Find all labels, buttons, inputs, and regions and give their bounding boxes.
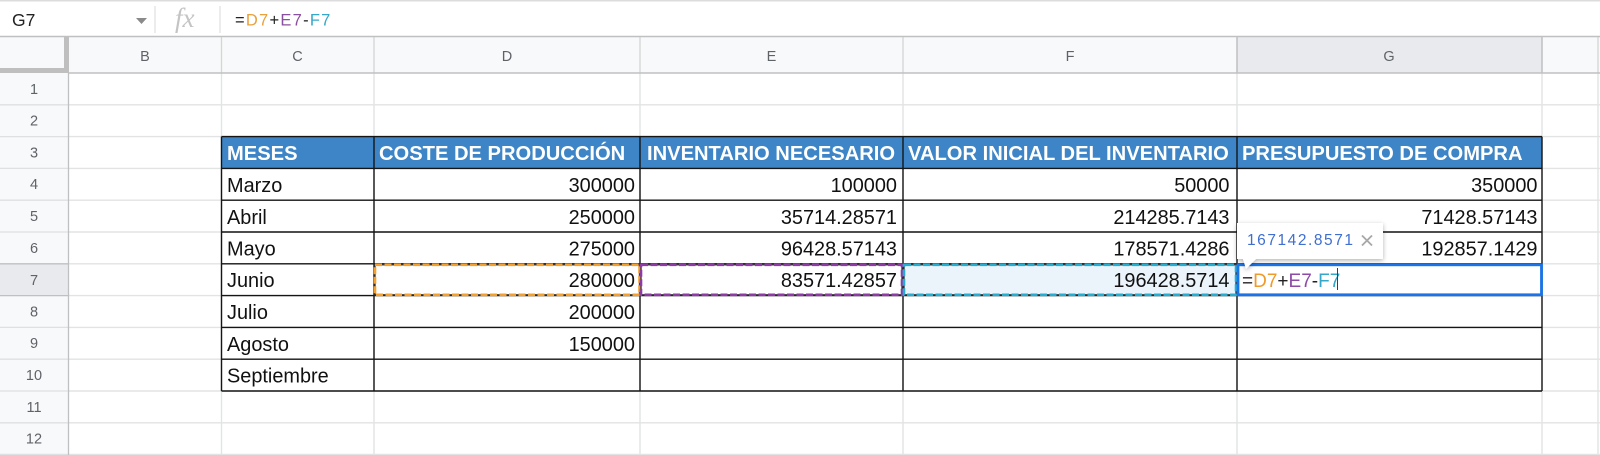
column: inventario necesario: 100000 bbox=[831, 175, 897, 197]
tooltip: formula result preview: 167142.8571 bbox=[1247, 232, 1355, 249]
column headers: G bbox=[1383, 49, 1395, 65]
row headers: 4 bbox=[30, 177, 38, 193]
icon: dropdown arrow bbox=[136, 18, 147, 24]
icon: close bbox=[1362, 236, 1372, 246]
row headers: 2 bbox=[30, 114, 38, 130]
table header row: INVENTARIO NECESARIO bbox=[647, 143, 895, 165]
column: coste de producción: 275000 bbox=[569, 238, 635, 260]
icon: fx: fx bbox=[175, 3, 195, 33]
column headers bbox=[0, 36, 1600, 73]
column headers: C bbox=[292, 49, 303, 65]
column: meses: Abril bbox=[227, 207, 267, 229]
column: coste de producción: 300000 bbox=[569, 175, 635, 197]
table header row: COSTE DE PRODUCCIÓN bbox=[379, 141, 625, 165]
row headers: 5 bbox=[30, 209, 38, 225]
highlighted cell F7 fill bbox=[903, 264, 1237, 296]
column: coste de producción: 200000 bbox=[569, 302, 635, 324]
table header row: VALOR INICIAL DEL INVENTARIO bbox=[908, 143, 1229, 165]
column headers: B bbox=[140, 49, 150, 65]
column: presupuesto de compra bbox=[1421, 175, 1538, 260]
table header row: PRESUPUESTO DE COMPRA bbox=[1242, 143, 1523, 165]
row headers: 11 bbox=[26, 400, 42, 416]
column headers: F bbox=[1066, 49, 1075, 65]
column: inventario necesario: 83571.42857 bbox=[781, 270, 897, 292]
row headers: 10 bbox=[26, 368, 42, 384]
column: valor inicial del inventario: 196428.5714 bbox=[1113, 270, 1230, 292]
formula bar bbox=[0, 0, 1600, 37]
dashed range D7 bbox=[375, 265, 640, 295]
cell reference: G7 bbox=[12, 10, 35, 30]
column: inventario necesario: 35714.28571 bbox=[781, 207, 897, 229]
row headers: 12 bbox=[26, 432, 42, 448]
table header row: MESES bbox=[227, 143, 298, 165]
formula in cell: =D7+E7-F7 bbox=[1242, 271, 1340, 292]
column: meses: Mayo bbox=[227, 238, 276, 260]
table borders bbox=[222, 137, 1542, 391]
column: presupuesto de compra: 192857.1429 bbox=[1421, 238, 1538, 260]
column: meses: Marzo bbox=[227, 175, 282, 197]
tooltip: formula result preview bbox=[1237, 223, 1383, 269]
column: coste de producción bbox=[569, 175, 635, 356]
column: presupuesto de compra: 350000 bbox=[1471, 175, 1538, 197]
formula text: =D7+E7-F7 bbox=[235, 12, 332, 30]
column: coste de producción: 280000 bbox=[569, 270, 635, 292]
column: coste de producción: 150000 bbox=[569, 334, 635, 356]
column headers: D bbox=[502, 49, 512, 65]
column: valor inicial del inventario: 50000 bbox=[1174, 175, 1230, 197]
column: meses bbox=[227, 175, 329, 388]
row headers: 6 bbox=[30, 241, 38, 257]
column headers: E bbox=[767, 49, 777, 65]
dashed range E7 bbox=[641, 265, 902, 295]
row headers: 9 bbox=[30, 336, 38, 352]
column: inventario necesario: 96428.57143 bbox=[781, 238, 897, 260]
row headers: 1 bbox=[30, 82, 38, 98]
column: meses: Julio bbox=[227, 302, 268, 324]
column: valor inicial del inventario bbox=[1113, 175, 1230, 292]
active cell G7 bbox=[1238, 265, 1542, 295]
column: inventario necesario bbox=[781, 175, 897, 292]
column: presupuesto de compra: 71428.57143 bbox=[1421, 207, 1538, 229]
column: coste de producción: 250000 bbox=[569, 207, 635, 229]
column: valor inicial del inventario: 214285.7143 bbox=[1113, 207, 1230, 229]
row headers: 8 bbox=[30, 304, 38, 320]
corner freeze handle bbox=[0, 37, 66, 70]
row headers: 3 bbox=[30, 146, 38, 162]
row headers: 7 bbox=[30, 273, 38, 289]
column: meses: Agosto bbox=[227, 334, 289, 356]
column: meses: Septiembre bbox=[227, 366, 329, 388]
row headers bbox=[0, 73, 68, 455]
column: valor inicial del inventario: 178571.4286 bbox=[1113, 238, 1230, 260]
dashed range F7 bbox=[904, 265, 1236, 295]
table header row bbox=[222, 137, 1542, 168]
column: meses: Junio bbox=[227, 270, 275, 292]
